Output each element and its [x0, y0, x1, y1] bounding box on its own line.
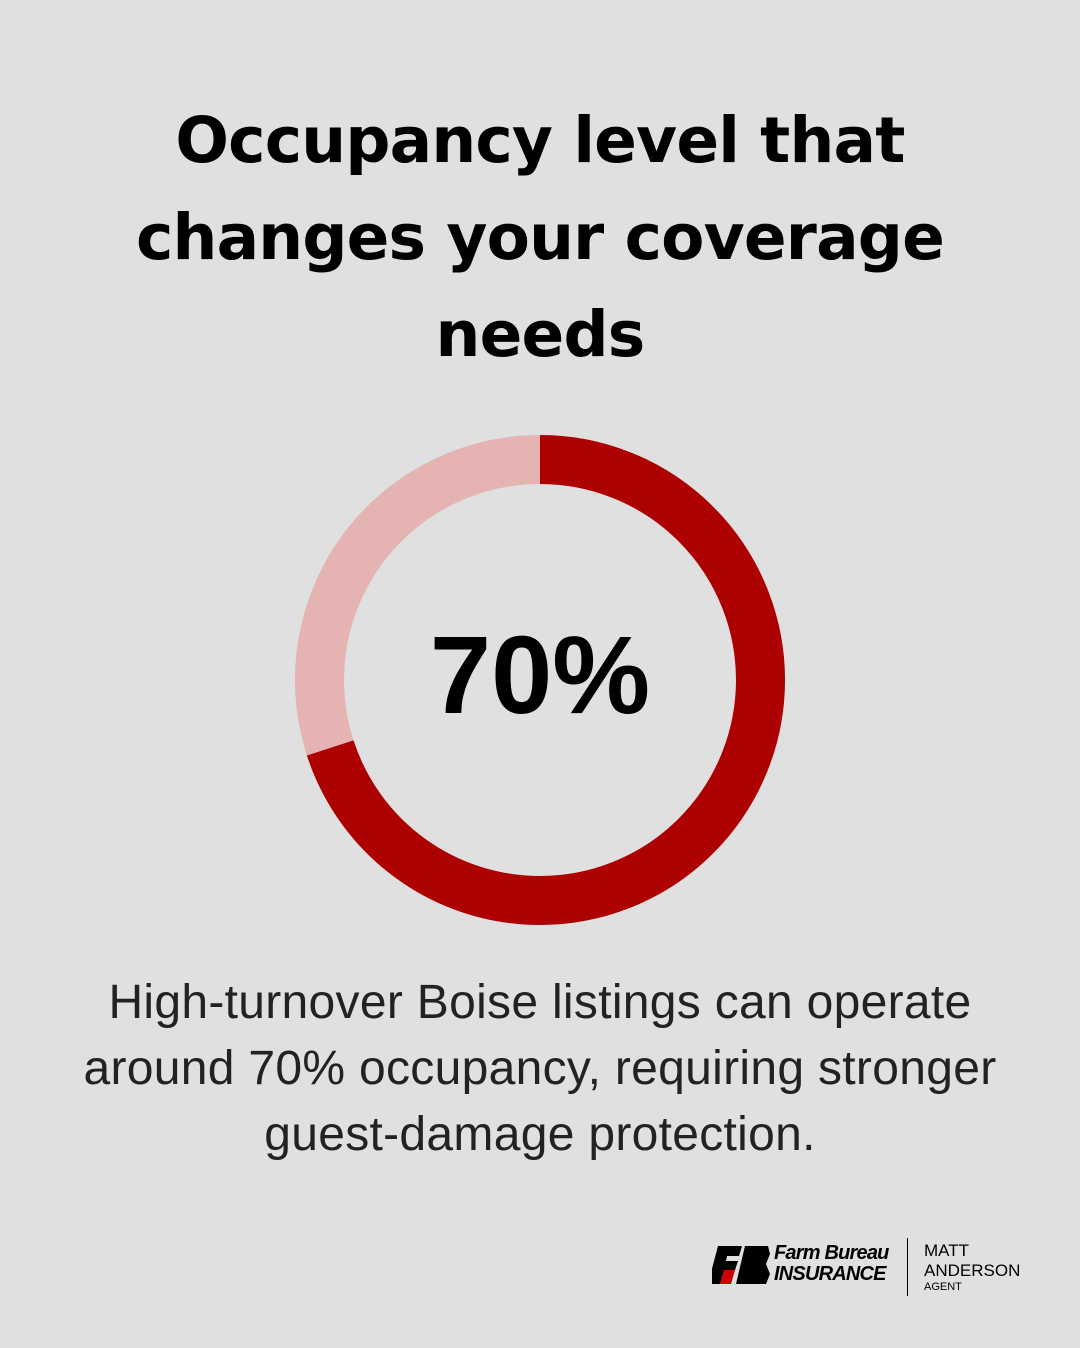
text block: description: around 70% occupancy, requiring stronger [84, 1042, 996, 1095]
logo: INSURANCE [774, 1263, 886, 1285]
text block: description: guest-damage protection. [264, 1108, 816, 1161]
logo: Farm Bureau [774, 1242, 889, 1264]
icon: FB mark [712, 1246, 770, 1284]
text block: description [84, 976, 996, 1161]
text block: description: High-turnover Boise listings can operate [108, 976, 972, 1029]
logo [712, 1238, 1020, 1296]
title: needs [436, 298, 644, 371]
logo: AGENT [924, 1281, 962, 1293]
logo: MATT [924, 1241, 969, 1260]
title [136, 104, 944, 371]
logo: ANDERSON [924, 1261, 1020, 1280]
donut chart: 70% [430, 614, 650, 737]
title: Occupancy level that [175, 104, 905, 177]
title: changes your coverage [136, 201, 944, 274]
